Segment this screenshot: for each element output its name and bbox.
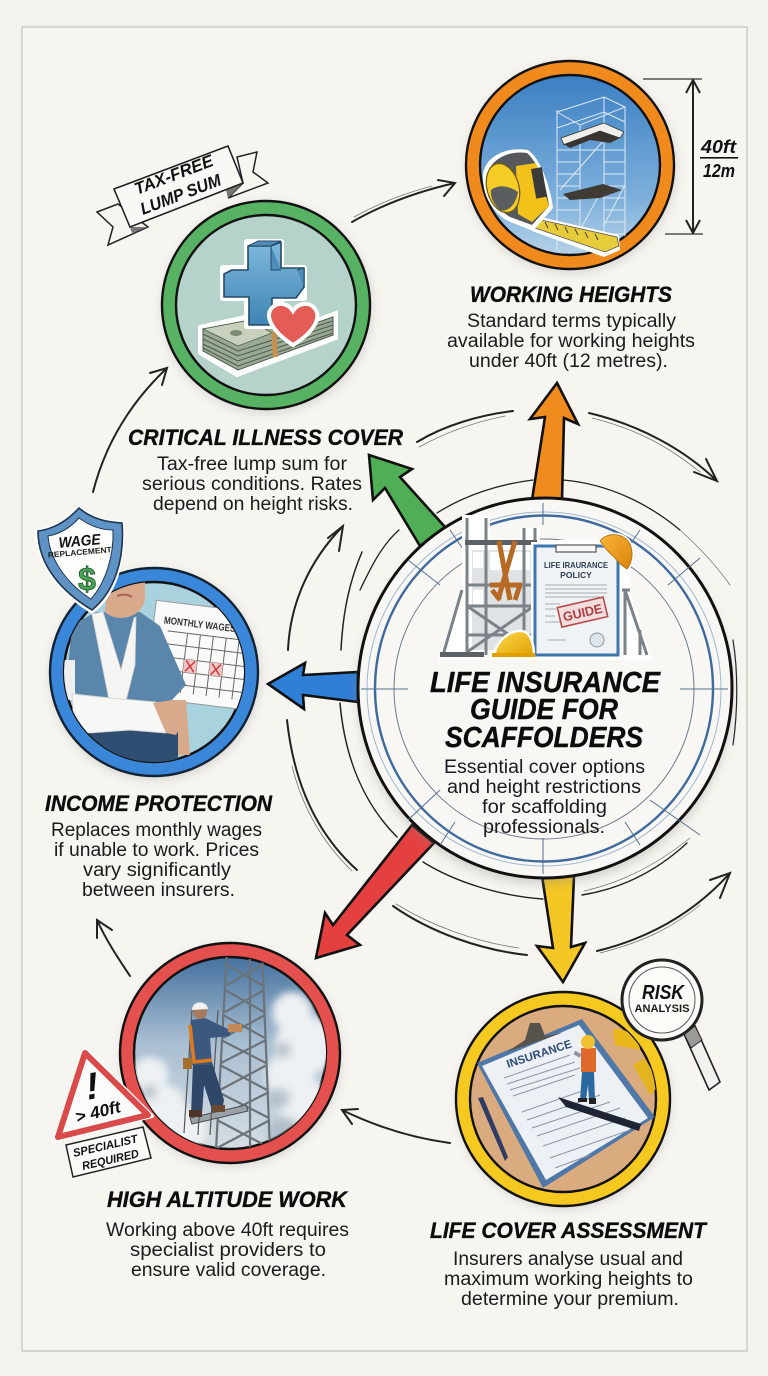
tape measure sticker xyxy=(481,149,620,257)
scaffold tower xyxy=(438,515,652,660)
policy clipboard xyxy=(531,542,622,659)
description: ensure valid coverage. xyxy=(131,1260,326,1281)
description xyxy=(142,454,362,515)
warning sign: ! xyxy=(83,1065,101,1109)
panel: working heights xyxy=(447,61,738,372)
arrow: red to high altitude xyxy=(316,825,434,958)
shirt and torso xyxy=(66,612,186,765)
arrow: outer arc lower right xyxy=(597,873,730,953)
calendar xyxy=(153,600,244,710)
description xyxy=(447,311,695,372)
description: specialist providers to xyxy=(130,1240,326,1261)
orange medallion xyxy=(466,61,676,273)
shield: wage replacement: REPLACEMENT xyxy=(48,545,112,560)
description: Insurers analyse usual and xyxy=(453,1249,683,1270)
green medallion xyxy=(162,201,372,413)
hub description: Essential cover options xyxy=(444,757,645,778)
scene: insurance clipboard: INSURANCE xyxy=(505,1038,574,1071)
description: Tax-free lump sum for xyxy=(157,454,348,475)
heading: LIFE COVER ASSESSMENT xyxy=(430,1218,707,1243)
arrow: income protection to critical illness xyxy=(93,368,167,492)
arrow: green to critical illness xyxy=(369,455,445,546)
description: serious conditions. Rates xyxy=(142,474,362,495)
magnifier: risk analysis xyxy=(622,960,720,1090)
arrow: blue to income protection xyxy=(268,663,358,709)
panel: income protection xyxy=(35,505,273,901)
cast xyxy=(72,694,170,733)
description xyxy=(51,820,262,901)
hub disc xyxy=(358,498,732,884)
arrow: outer arc upper right xyxy=(589,413,717,481)
description: Working above 40ft requires xyxy=(106,1220,349,1241)
cloud shading xyxy=(143,1042,303,1153)
description: available for working heights xyxy=(447,331,695,352)
shield: wage replacement: $ xyxy=(78,561,96,597)
scene: injured worker and calendar xyxy=(64,582,244,762)
mini worker xyxy=(573,1035,596,1104)
label: specialist required xyxy=(66,1127,151,1177)
warning sign: > 40ft xyxy=(73,1097,124,1127)
worker xyxy=(183,1002,242,1117)
description: depend on height risks. xyxy=(153,494,353,515)
hub: life insurance guide xyxy=(358,498,732,884)
description: between insurers. xyxy=(82,880,235,901)
sketch arcs around hub xyxy=(287,411,737,955)
platform xyxy=(190,1105,248,1124)
height dimension marker: 40ft xyxy=(700,137,737,157)
flow arrows: curved connectors xyxy=(93,180,737,1143)
hub title: LIFE INSURANCE xyxy=(430,667,662,699)
description xyxy=(444,1249,693,1310)
heading: INCOME PROTECTION xyxy=(45,791,273,816)
stamp: guide: GUIDE xyxy=(561,601,604,624)
blue medallion xyxy=(50,568,260,780)
scene: climber on tower xyxy=(134,957,326,1148)
icon: medical cross xyxy=(223,241,304,326)
arrow: life cover to high altitude xyxy=(342,1109,450,1143)
hub description: and height restrictions xyxy=(447,777,641,798)
red medallion xyxy=(120,943,341,1166)
hub illustration: scaffold and policy xyxy=(438,515,652,660)
label: specialist required: REQUIRED xyxy=(81,1148,140,1173)
safety harness xyxy=(490,541,522,600)
arrow: yellow to life cover xyxy=(537,876,585,982)
magnifier: risk analysis: RISK xyxy=(642,982,685,1004)
panel: critical illness cover xyxy=(97,146,403,515)
scene: insurance clipboard xyxy=(477,1019,660,1188)
heading: WORKING HEIGHTS xyxy=(470,282,672,307)
icon: heart xyxy=(269,304,317,345)
policy clipboard: POLICY xyxy=(560,570,592,580)
calendar: MONTHLY WAGES xyxy=(163,615,236,635)
label: specialist required: SPECIALIST xyxy=(72,1133,140,1160)
arrow: orange to working heights xyxy=(530,383,578,500)
height dimension marker xyxy=(643,79,738,234)
tower xyxy=(216,950,270,1150)
description: Standard terms typically xyxy=(467,311,677,332)
ribbon: tax-free lump sum: LUMP SUM xyxy=(138,170,225,219)
ribbon: tax-free lump sum xyxy=(97,146,268,245)
hub title: GUIDE FOR xyxy=(470,694,618,726)
yellow medallion xyxy=(456,992,671,1209)
arrow: outer arc to critical illness text xyxy=(288,526,343,650)
description: Replaces monthly wages xyxy=(51,820,262,841)
heading: CRITICAL ILLNESS COVER xyxy=(128,425,403,450)
orange hard hat xyxy=(600,535,632,569)
magnifier: risk analysis: ANALYSIS xyxy=(634,1003,690,1015)
neck and chin xyxy=(105,580,145,618)
shield: wage replacement: WAGE xyxy=(58,531,102,552)
sling xyxy=(92,612,136,705)
description: vary significantly xyxy=(83,860,232,881)
warning sign xyxy=(56,1049,152,1140)
pens xyxy=(558,1097,641,1131)
arm xyxy=(170,700,190,755)
hub title xyxy=(430,667,662,754)
yellow hard hat xyxy=(492,631,535,657)
description: maximum working heights to xyxy=(444,1269,693,1290)
height dimension marker: 12m xyxy=(703,161,735,181)
arrow: high altitude to income protection xyxy=(97,920,130,976)
description xyxy=(106,1220,349,1281)
clouds xyxy=(132,992,335,1152)
arrow: critical illness to working heights xyxy=(352,180,455,222)
icon: banknotes xyxy=(200,313,336,375)
description: if unable to work. Prices xyxy=(54,840,259,861)
hub description xyxy=(444,757,645,838)
hub title: SCAFFOLDERS xyxy=(445,722,644,754)
scene: scaffold tower xyxy=(557,97,625,250)
policy clipboard: LIFE IRAURANCE xyxy=(544,560,608,570)
hub description: for scaffolding xyxy=(482,797,607,818)
big arrows from hub xyxy=(268,383,585,982)
panel: life cover assessment xyxy=(430,960,720,1310)
shield: wage replacement xyxy=(35,505,125,614)
heading: HIGH ALTITUDE WORK xyxy=(107,1187,349,1212)
ribbon: tax-free lump sum: TAX-FREE xyxy=(132,151,217,199)
panel: high altitude work xyxy=(56,943,349,1281)
description: determine your premium. xyxy=(461,1289,679,1310)
hub description: professionals. xyxy=(483,817,605,838)
description: under 40ft (12 metres). xyxy=(469,351,668,372)
